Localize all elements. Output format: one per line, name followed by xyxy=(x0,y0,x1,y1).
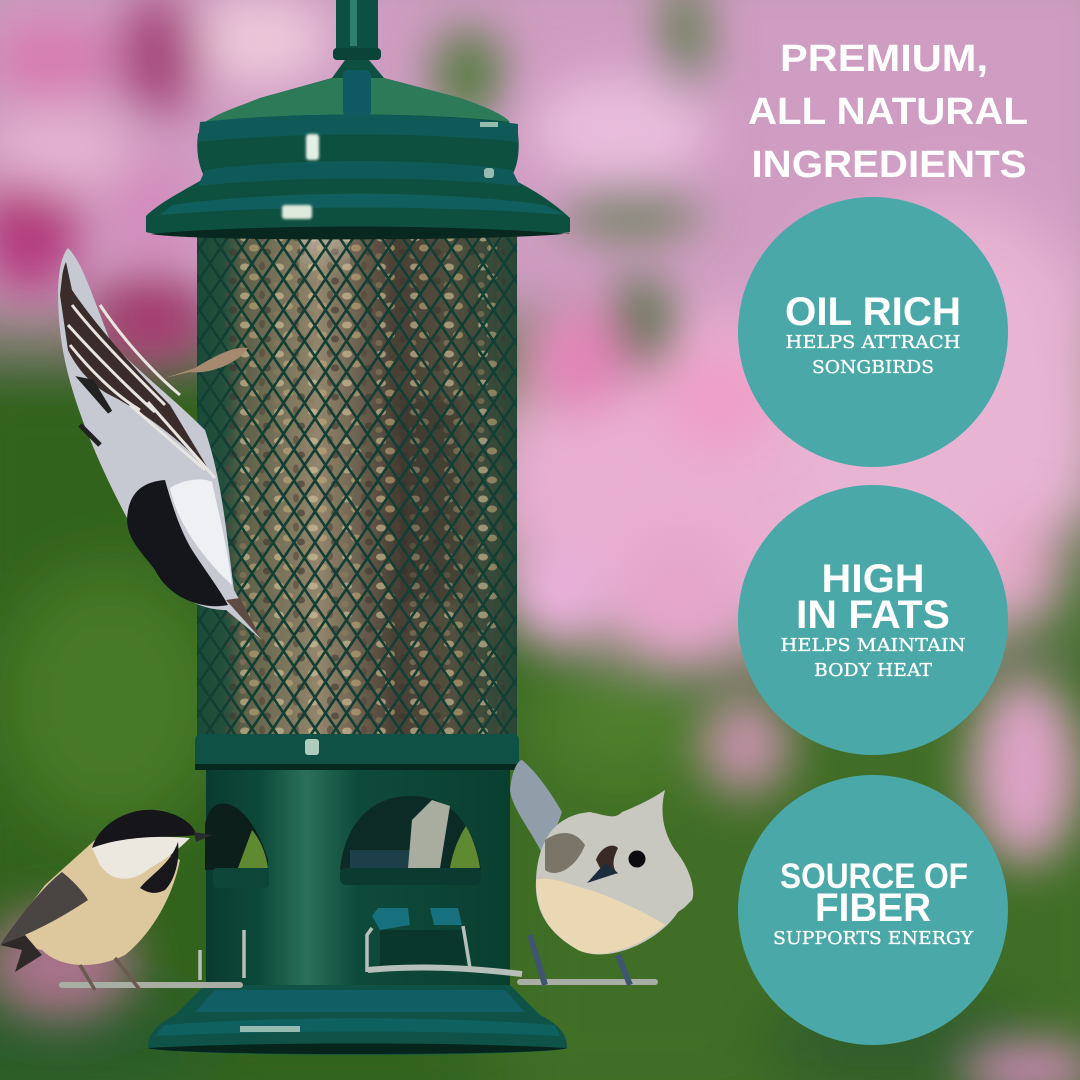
panel: source of fiber xyxy=(738,775,1008,1045)
heading: high in fats: IN FATS xyxy=(796,593,950,637)
lower collar and base cylinder xyxy=(195,734,522,988)
heading: high in fats xyxy=(796,557,950,637)
feeding port: left xyxy=(205,803,269,888)
feeding port: right xyxy=(340,796,481,885)
heading: source of fiber: FIBER xyxy=(815,886,931,930)
text: helps maintain body heat: BODY HEAT xyxy=(814,660,932,681)
title: ALL NATURAL xyxy=(748,91,1028,133)
text: helps maintain body heat: HELPS MAINTAIN xyxy=(780,635,966,656)
heading: oil rich: OIL RICH xyxy=(785,290,961,334)
bird: nuthatch on mesh xyxy=(58,248,262,640)
bird: titmouse right xyxy=(510,760,693,985)
hanging rod xyxy=(333,0,381,60)
heading: source of fiber: SOURCE OF xyxy=(780,857,968,896)
text: helps attrach songbirds: HELPS ATTRACH xyxy=(786,332,960,353)
title: INGREDIENTS xyxy=(752,144,1026,186)
title: PREMIUM, xyxy=(780,38,988,80)
title xyxy=(748,38,1028,186)
text: helps attrach songbirds xyxy=(786,332,960,378)
bird: chickadee left xyxy=(0,810,212,990)
dome roof xyxy=(146,60,570,239)
panel: high in fats xyxy=(738,485,1008,755)
mesh tube with seeds xyxy=(197,228,517,738)
text: supports energy: SUPPORTS ENERGY xyxy=(773,928,974,949)
text: helps maintain body heat xyxy=(780,635,966,681)
bird feeder xyxy=(62,0,655,1055)
panel: oil rich xyxy=(738,197,1008,467)
bottom tray xyxy=(148,985,567,1055)
text: helps attrach songbirds: SONGBIRDS xyxy=(812,357,934,378)
perch rod xyxy=(62,982,655,985)
heading: source of fiber xyxy=(780,857,968,930)
heading: high in fats: HIGH xyxy=(822,557,924,601)
